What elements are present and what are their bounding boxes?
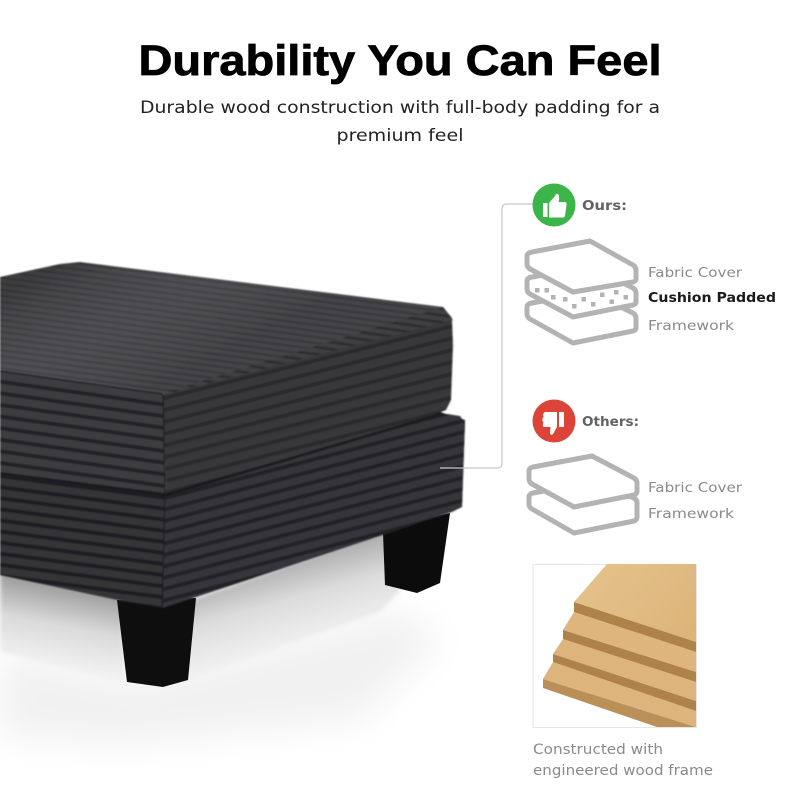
others layer labels: Fabric Cover <box>648 480 742 496</box>
wood caption: Constructed with <box>533 742 663 758</box>
top layer <box>527 241 636 292</box>
ottoman <box>0 262 465 687</box>
base left face <box>0 475 165 608</box>
corner seams <box>162 394 165 608</box>
subtitle <box>140 97 660 145</box>
middle layer <box>527 266 636 317</box>
top layer <box>529 456 637 507</box>
dark underlay <box>0 412 465 608</box>
fourth board <box>543 662 696 727</box>
title: Durability You Can Feel <box>138 37 662 85</box>
front leg <box>117 598 196 687</box>
subtitle: premium feel <box>336 125 464 145</box>
others layer labels <box>648 480 742 522</box>
others label: Others: <box>582 415 639 430</box>
icon: thumbs down <box>532 400 576 442</box>
ours layer labels: Fabric Cover <box>648 265 742 281</box>
others layer labels: Framework <box>648 506 734 522</box>
connector line <box>440 204 533 468</box>
ours layer labels: Cushion Padded <box>648 290 776 306</box>
back leg <box>383 513 450 593</box>
ours label: Ours: <box>582 199 627 214</box>
bottom layer <box>527 292 636 343</box>
subtitle: Durable wood construction with full-body padding for a <box>140 97 660 117</box>
wood caption: engineered wood frame <box>533 763 713 779</box>
upholstery <box>0 262 465 608</box>
icon: thumbs up <box>532 184 576 226</box>
icon: two layer cushion <box>529 456 637 533</box>
second board <box>563 612 696 672</box>
foam dots <box>535 288 628 308</box>
wood panel photo <box>533 564 696 728</box>
ours layer labels: Framework <box>648 318 734 334</box>
cushion right face <box>163 320 453 493</box>
cushion left face <box>0 370 166 493</box>
floor shadow <box>0 530 440 745</box>
bottom layer <box>529 482 637 533</box>
icon: three layer cushion <box>527 241 636 343</box>
wood caption <box>533 742 713 779</box>
cushion top <box>0 262 453 398</box>
ours layer labels <box>648 265 776 334</box>
base right face <box>163 414 465 608</box>
third board <box>553 639 696 701</box>
seam <box>0 413 442 495</box>
top board <box>574 564 696 642</box>
